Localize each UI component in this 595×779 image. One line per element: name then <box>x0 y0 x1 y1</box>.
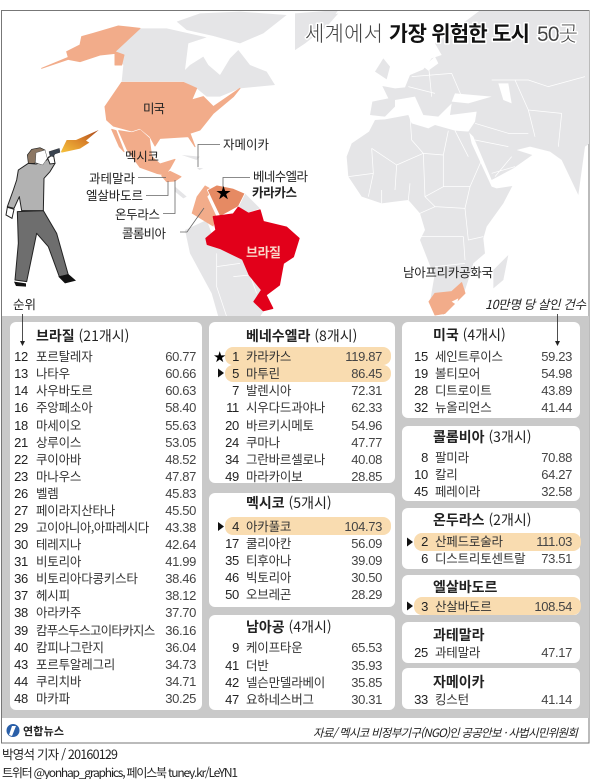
rows: Brazil cities: 39 <box>14 623 28 638</box>
heading: Mexico: 멕시코 (5개시) <box>246 493 332 513</box>
label: El Salvador: 엘살바도르 <box>86 189 143 203</box>
rows: US cities <box>414 346 572 416</box>
rows: Brazil cities: 34.73 <box>165 657 196 672</box>
rows: Colombia cities: 칼리 <box>435 464 458 483</box>
rows: Mexico cities <box>225 516 382 603</box>
rows: Brazil cities: 45.50 <box>165 503 196 518</box>
rows: Mexico cities: 39.09 <box>351 553 382 568</box>
rows: Brazil cities: 47.87 <box>165 469 196 484</box>
rows: Brazil cities: 45.83 <box>165 486 196 501</box>
panel: Colombia <box>402 426 580 501</box>
highlight: Acapulco <box>225 517 391 535</box>
rows: Mexico cities: 28.29 <box>351 587 382 602</box>
rows: Brazil cities: 16 <box>14 400 28 415</box>
label: Guatemala <box>89 172 166 186</box>
heading: Jamaica: 자메이카 <box>433 672 485 692</box>
label: Venezuela and Caracas: 베네수엘라 <box>253 170 308 184</box>
rows: Brazil cities <box>14 346 196 707</box>
heading: Colombia: 콜롬비아 (3개시) <box>433 427 531 447</box>
title <box>305 23 578 46</box>
rows: Brazil cities: 18 <box>14 418 28 433</box>
rows: Venezuela cities: 119.87 <box>345 349 382 364</box>
map: Venezuela <box>207 185 245 217</box>
heading: South Africa: 남아공 (4개시) <box>246 617 332 637</box>
row: San Salvador <box>421 596 572 615</box>
rows: Brazil cities: 헤시피 <box>36 585 70 604</box>
rows: Venezuela cities: 마라카이보 <box>246 466 303 485</box>
rows: Brazil cities: 36 <box>14 571 28 586</box>
heading: Honduras: 온두라스 (2개시) <box>433 510 531 530</box>
rows: Mexico cities: 56.09 <box>351 536 382 551</box>
heading: El Salvador: 엘살바도르 <box>433 577 498 597</box>
rows: Brazil cities: 14 <box>14 383 28 398</box>
rows: Brazil cities: 42.64 <box>165 537 196 552</box>
rows: Venezuela cities: 그란바르셀로나 <box>246 449 326 468</box>
map labels <box>86 102 493 280</box>
rows: Brazil cities: 22 <box>14 452 28 467</box>
icon: pants <box>15 211 68 282</box>
rows: South Africa cities: 넬슨만델라베이 <box>246 672 325 691</box>
rows: Brazil cities: 37 <box>14 588 28 603</box>
title: bold middle: 가장 위험한 도시 <box>389 23 530 46</box>
rows: Honduras cities: 111.03 <box>536 534 572 549</box>
rows: Colombia cities: 70.88 <box>541 450 572 465</box>
row: Guatemala city: 47.17 <box>541 645 572 660</box>
rows: Honduras cities: 디스트리토센트랄 <box>435 548 526 567</box>
rows: Brazil cities: 26 <box>14 486 28 501</box>
panel: Jamaica <box>402 668 580 709</box>
rows: Brazil cities: 37.70 <box>165 605 196 620</box>
rows: Venezuela cities: 바르키시메토 <box>246 415 314 434</box>
rows: Brazil cities: 비토리아 <box>36 551 82 570</box>
rows: Brazil cities: 36.04 <box>165 640 196 655</box>
label: Colombia: 콜롬비아 <box>122 227 166 241</box>
rows: US cities: 43.89 <box>541 383 572 398</box>
rows: US cities: 19 <box>414 366 428 381</box>
heading: Brazil: 브라질 (21개시) <box>36 326 129 346</box>
rows: Brazil cities: 48 <box>14 691 28 706</box>
map: Mexico <box>112 129 175 175</box>
rows: Brazil cities: 36.16 <box>165 623 196 638</box>
rows: Brazil cities: 페이라지산타나 <box>36 500 116 519</box>
rows: Brazil cities: 12 <box>14 349 28 364</box>
title: light end: 50곳 <box>537 23 578 46</box>
rows: Brazil cities: 44 <box>14 674 28 689</box>
label: Jamaica: 자메이카 <box>223 138 269 152</box>
rows: Brazil cities: 나타우 <box>36 363 70 382</box>
rows: Honduras cities <box>421 531 572 567</box>
rows: Brazil cities: 27 <box>14 503 28 518</box>
map: United States <box>105 82 240 147</box>
rows: South Africa cities: 요하네스버그 <box>246 689 314 708</box>
label and arrow: rank <box>13 294 36 346</box>
rows: Venezuela cities: 시우다드과야나 <box>246 397 326 416</box>
rows: South Africa cities: 35.93 <box>351 658 382 673</box>
row: San Salvador: 108.54 <box>534 599 572 614</box>
rows: Mexico cities: 아카풀코 <box>246 516 291 535</box>
rows: Brazil cities: 마카파 <box>36 688 71 707</box>
panel: El Salvador <box>402 575 581 615</box>
rows: Venezuela cities: 5 <box>232 366 239 381</box>
rows: Brazil cities: 30 <box>14 537 28 552</box>
label and arrow: rank: 순위 <box>13 294 36 313</box>
rows: Venezuela cities: 72.31 <box>351 383 382 398</box>
icon: star: ★ <box>213 348 226 366</box>
row: Guatemala city: 과테말라 <box>435 642 481 661</box>
rows: Venezuela cities: 24 <box>225 435 239 450</box>
rows: Brazil cities: 60.77 <box>165 349 196 364</box>
rows: Brazil cities: 상루이스 <box>36 432 81 451</box>
rows: South Africa cities: 65.53 <box>351 640 382 655</box>
rows: Venezuela cities: 카라카스 <box>246 346 291 365</box>
rows: Brazil cities: 38 <box>14 605 28 620</box>
rows: Venezuela cities: 28.85 <box>351 469 382 484</box>
highlight: San Pedro Sula <box>414 533 581 551</box>
rows: Brazil cities: 38.12 <box>165 588 196 603</box>
rows: Brazil cities: 48.52 <box>165 452 196 467</box>
rows: Brazil cities: 비토리아다콩키스타 <box>36 568 138 587</box>
rows: Mexico cities: 빅토리아 <box>246 567 292 586</box>
rows: US cities: 28 <box>414 383 428 398</box>
icon: arrow <box>407 538 413 546</box>
rows: Brazil cities: 58.40 <box>165 400 196 415</box>
rows: Honduras cities: 73.51 <box>541 551 572 566</box>
rows: Mexico cities: 30.50 <box>351 570 382 585</box>
rows: Brazil cities: 마세이오 <box>36 415 81 434</box>
rows: US cities: 15 <box>414 349 428 364</box>
label: Venezuela and Caracas: ★ <box>216 185 231 202</box>
logo: Yonhap News: 연합뉴스 <box>23 723 64 739</box>
map: Europe, Asia, Africa <box>295 7 590 315</box>
rows: South Africa cities: 케이프타운 <box>246 637 303 656</box>
panel: United States <box>402 322 580 418</box>
rows: Brazil cities: 60.63 <box>165 383 196 398</box>
highlight: San Salvador <box>414 597 581 615</box>
rows: Brazil cities: 23 <box>14 469 28 484</box>
rows: Brazil cities: 쿠리치바 <box>36 671 82 690</box>
rows: Colombia cities: 페레이라 <box>435 481 481 500</box>
map: South America grey <box>185 193 263 317</box>
icon: pistol <box>49 148 60 157</box>
row: Kingston <box>414 689 572 708</box>
rows: Colombia cities: 64.27 <box>541 467 572 482</box>
rows: Mexico cities: 오브레곤 <box>246 584 291 603</box>
rows: Brazil cities: 13 <box>14 366 28 381</box>
row: Guatemala city <box>414 642 572 661</box>
rows: Colombia cities: 45 <box>414 484 428 499</box>
rows: Brazil cities: 29 <box>14 520 28 535</box>
rows: Brazil cities: 31 <box>14 554 28 569</box>
shooter illustration <box>6 130 99 287</box>
rows: Brazil cities: 38.46 <box>165 571 196 586</box>
rows: Brazil cities: 고이아니아,아파레시다 <box>36 517 150 536</box>
rows: South Africa cities <box>225 637 382 708</box>
label: Honduras <box>115 180 175 222</box>
map: Central America <box>162 171 181 182</box>
rows: Venezuela cities: 49 <box>225 469 239 484</box>
rows: Mexico cities: 50 <box>225 587 239 602</box>
rows: Brazil cities: 캄푸스두스고이타카지스 <box>36 620 155 639</box>
rows: Brazil cities: 43 <box>14 657 28 672</box>
rows: Venezuela cities: 20 <box>225 418 239 433</box>
map: Brazil <box>206 207 299 311</box>
row: Guatemala city: 25 <box>414 645 428 660</box>
rows: Mexico cities: 티후아나 <box>246 550 292 569</box>
label: USA: 미국 <box>143 102 165 116</box>
map: South Africa <box>429 283 465 315</box>
rows: US cities: 뉴올리언스 <box>435 397 492 416</box>
icon: arrow <box>218 368 224 378</box>
heading: Guatemala: 과테말라 <box>433 625 485 645</box>
row: San Salvador: 산살바도르 <box>435 596 492 615</box>
rows: Brazil cities: 마나우스 <box>36 466 81 485</box>
table background panel <box>2 316 589 718</box>
rows: US cities: 볼티모어 <box>435 363 480 382</box>
rows: Brazil cities: 40 <box>14 640 28 655</box>
map: Alaska <box>42 26 140 68</box>
rows: Venezuela cities: 54.96 <box>351 418 382 433</box>
rows: Brazil cities: 캄피나그란지 <box>36 637 104 656</box>
panel: Venezuela <box>209 322 395 485</box>
rows: Brazil cities: 41.99 <box>165 554 196 569</box>
rows: Mexico cities: 104.73 <box>344 519 382 534</box>
rows: South Africa cities: 41 <box>225 658 239 673</box>
rows: Honduras cities: 산페드로술라 <box>435 531 504 550</box>
panel: Brazil <box>10 322 202 710</box>
rows: Brazil cities: 30.25 <box>165 691 196 706</box>
rows: Brazil cities: 55.63 <box>165 418 196 433</box>
rows: South Africa cities: 9 <box>232 640 239 655</box>
rows: Venezuela cities: 40.08 <box>351 452 382 467</box>
rows: Venezuela cities: 마투린 <box>246 363 280 382</box>
rows: Brazil cities: 아라카주 <box>36 602 81 621</box>
rows: South Africa cities: 42 <box>225 675 239 690</box>
rows: Colombia cities: 8 <box>421 450 428 465</box>
panel: Guatemala <box>402 622 580 663</box>
label and arrow: murders per 100k: 10만명 당 살인 건수 <box>485 294 586 313</box>
rows: Brazil cities: 테레지나 <box>36 534 82 553</box>
rows: Brazil cities: 주앙페소아 <box>36 397 93 416</box>
rows: Brazil cities: 쿠이아바 <box>36 449 82 468</box>
label: Mexico: 멕시코 <box>125 150 159 164</box>
rows: Brazil cities: 34.71 <box>165 674 196 689</box>
row: San Salvador: 3 <box>421 599 428 614</box>
rows: Brazil cities: 43.38 <box>165 520 196 535</box>
map: Colombia <box>192 185 217 227</box>
rows: Mexico cities: 46 <box>225 570 239 585</box>
label: Honduras: 온두라스 <box>115 208 160 222</box>
rows: Venezuela cities: 발렌시아 <box>246 380 292 399</box>
label: Brazil: 브라질 <box>246 245 281 260</box>
title: light start: 세계에서 <box>305 23 383 46</box>
rows: Venezuela cities: 62.33 <box>351 400 382 415</box>
panel: South Africa <box>209 615 395 710</box>
rows: Brazil cities: 벨렘 <box>36 483 59 502</box>
rows: Mexico cities: 4 <box>232 519 239 534</box>
rows: Brazil cities: 53.05 <box>165 435 196 450</box>
rows: Mexico cities: 35 <box>225 553 239 568</box>
row: Kingston: 33 <box>414 692 428 707</box>
rows: Venezuela cities: 86.45 <box>351 366 382 381</box>
rows: South Africa cities: 30.31 <box>351 692 382 707</box>
icon: arrow <box>407 602 413 610</box>
rows: Honduras cities: 6 <box>421 551 428 566</box>
panel: Mexico <box>209 493 395 607</box>
rows: Venezuela cities: 쿠마나 <box>246 432 281 451</box>
label: Colombia <box>122 208 204 241</box>
rows: US cities: 59.23 <box>541 349 572 364</box>
rows: South Africa cities: 47 <box>225 692 239 707</box>
rows: US cities: 41.44 <box>541 400 572 415</box>
heading: United States: 미국 (4개시) <box>433 325 506 345</box>
source note: 자료/ 멕시코 비정부기구(NGO)인 공공안보 · 사법시민위원회 <box>313 725 579 741</box>
rows: Brazil cities: 포르투알레그리 <box>36 654 115 673</box>
rows: Venezuela cities: 1 <box>232 349 239 364</box>
row: Kingston: 킹스턴 <box>435 689 469 708</box>
rows: Venezuela cities: 11 <box>226 400 239 415</box>
icon: arrow <box>218 522 224 531</box>
rows: South Africa cities: 35.85 <box>351 675 382 690</box>
rows: US cities: 디트로이트 <box>435 380 492 399</box>
heading: Venezuela: 베네수엘라 (8개시) <box>246 326 357 346</box>
rows: Colombia cities: 팔미라 <box>435 447 470 466</box>
label: El Salvador <box>86 181 168 203</box>
map: Canada and arctic <box>115 12 338 97</box>
icon: hands <box>6 154 55 218</box>
icon: head <box>27 148 45 163</box>
world map <box>42 7 590 317</box>
label: Jamaica <box>198 138 269 167</box>
rows: Venezuela cities: 34 <box>225 452 239 467</box>
rows: Honduras cities: 2 <box>421 534 428 549</box>
rows: Brazil cities: 사우바도르 <box>36 380 93 399</box>
row: Kingston: 41.14 <box>541 692 572 707</box>
byline: 박영석 기자 / 20160129 <box>2 744 118 763</box>
rows: Brazil cities: 21 <box>14 435 28 450</box>
rows: South Africa cities: 더반 <box>246 655 269 674</box>
rows: Venezuela cities <box>225 346 382 485</box>
rows: Mexico cities: 17 <box>225 536 239 551</box>
label and arrow: murders per 100k <box>485 294 586 346</box>
rows: Venezuela cities: 7 <box>232 383 239 398</box>
icon: muzzle flame <box>61 130 99 153</box>
rows: Colombia cities: 10 <box>414 467 428 482</box>
rows: Colombia cities: 32.58 <box>541 484 572 499</box>
highlights: Caracas and Maturin <box>225 347 391 382</box>
rows: Venezuela cities: 47.77 <box>351 435 382 450</box>
label: Venezuela and Caracas: 카라카스 <box>252 185 297 200</box>
label: Guatemala: 과테말라 <box>89 172 135 186</box>
icon: jacket <box>7 157 55 211</box>
label: South Africa: 남아프리카공화국 <box>403 266 493 280</box>
label: Venezuela and Caracas <box>216 170 308 202</box>
rows: US cities: 32 <box>414 400 428 415</box>
icon: shoes <box>14 274 76 287</box>
rows: Brazil cities: 포르탈레자 <box>36 346 93 365</box>
rows: Brazil cities: 60.66 <box>165 366 196 381</box>
rows: US cities: 세인트루이스 <box>435 346 503 365</box>
rows: Colombia cities <box>414 447 572 500</box>
panel: Honduras <box>402 508 581 569</box>
rows: US cities: 54.98 <box>541 366 572 381</box>
rows: Mexico cities: 쿨리아칸 <box>246 533 292 552</box>
